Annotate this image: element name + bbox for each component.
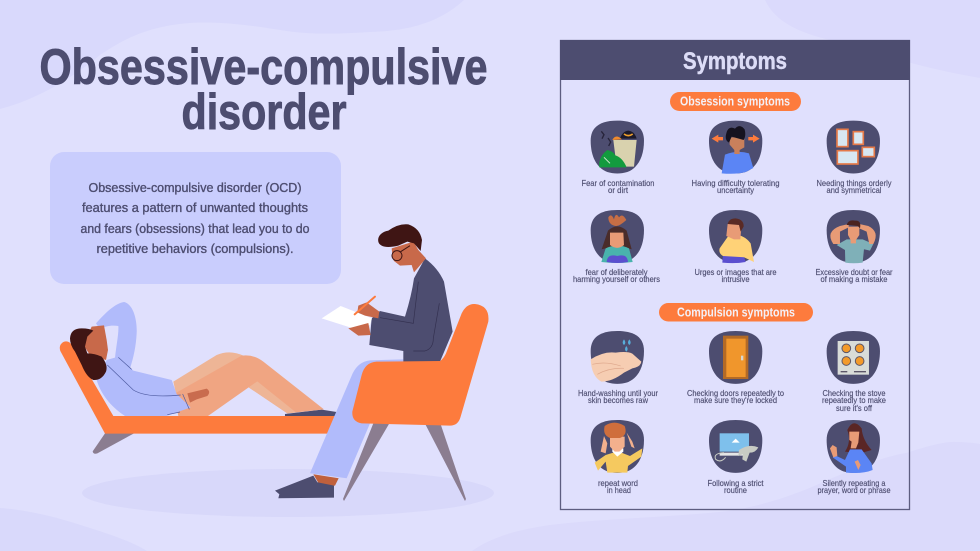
captions: compulsion symptoms [578,388,891,495]
icon: person with arrows [709,121,762,174]
captions: compulsion symptoms: Silently repeating a [822,478,886,488]
icon: person with brain [591,420,644,473]
captions: compulsion symptoms: Following a strict [708,478,764,488]
captions: compulsion symptoms: Checking the stove [822,388,886,398]
text block: OCD description [50,152,341,284]
text block: OCD description: Obsessive-compulsive disorder (OCD) [88,181,302,195]
captions: obsession symptoms: and symmetrical [826,185,882,195]
heading: obsession symptoms: Obsession symptoms [680,94,790,108]
captions: obsession symptoms: intrusive [722,274,750,284]
captions: compulsion symptoms: repeatedly to make [822,395,886,405]
title [40,39,488,140]
icon group: obsession row icons [591,121,880,263]
captions: compulsion symptoms: in head [607,485,631,495]
patient arm behind head [96,302,137,368]
captions: obsession symptoms: or dirt [608,185,629,195]
couch [60,341,335,434]
captions: compulsion symptoms: Checking doors repeatedly to [687,388,784,398]
heading: obsession symptoms [670,92,801,111]
therapist lower hand [348,323,371,336]
therapist upper hand [357,302,379,318]
therapist ankle [313,474,339,486]
title: Obsessive-compulsive [40,39,488,95]
captions: compulsion symptoms: prayer, word or phrase [818,485,891,495]
icon: person hand on face [709,210,762,263]
captions: compulsion symptoms: repeat word [598,478,638,488]
pen [355,297,375,314]
captions: obsession symptoms: of making a mistake [820,274,888,284]
captions: obsession symptoms: Needing things orderly [816,178,892,188]
icon: door [709,331,762,384]
icon: man holding head [827,210,880,263]
therapist neck and face [392,242,426,272]
patient torso [97,357,191,416]
icon: stove [827,331,880,384]
heading: compulsion symptoms [659,303,813,322]
patient hand [187,389,209,403]
text block: OCD description: features a pattern of unwanted thoughts [82,201,308,215]
glasses [392,246,410,261]
patient face [83,325,108,360]
icon: woman praying [827,420,880,473]
captions: obsession symptoms: uncertainty [717,185,755,195]
chair [352,304,488,426]
captions: obsession symptoms [573,178,893,284]
captions: compulsion symptoms: make sure they're locked [694,395,777,405]
captions: compulsion symptoms: sure it's off [836,403,873,413]
captions: obsession symptoms: harming yourself or others [573,274,660,284]
captions: obsession symptoms: fear of deliberately [586,267,648,277]
captions: obsession symptoms: Fear of contamination [582,178,655,188]
captions: compulsion symptoms: Hand-washing until your [578,388,658,398]
therapist trousers [310,359,403,478]
icon: woman covering face [591,210,644,263]
captions: compulsion symptoms: skin becomes raw [588,395,649,405]
paper [322,306,372,330]
text block: OCD description: and fears (obsessions) that lead you to do [80,222,310,236]
patient front leg [174,355,324,416]
symptoms header: Symptoms [683,48,787,75]
captions: obsession symptoms: Having difficulty tolerating [692,178,780,188]
therapist hair [378,224,422,251]
icon: picture frames [827,121,880,173]
panel: symptoms [560,40,910,510]
chair legs [343,423,466,501]
heading: compulsion symptoms: Compulsion symptoms [677,306,795,320]
text block: OCD description: repetitive behaviors (compulsions). [96,242,294,256]
shoe [285,410,337,416]
icon: washing hands [591,331,644,384]
title: disorder [182,84,346,140]
patient back leg [173,352,250,397]
icon group: compulsion row icons [591,331,880,473]
therapist jacket [369,258,453,362]
patient hair [70,328,107,380]
icon: trash can [591,121,644,173]
captions: obsession symptoms: Excessive doubt or fear [816,267,893,277]
couch leg [93,433,134,454]
icon: screen and controller [709,420,762,473]
captions: compulsion symptoms: routine [724,485,747,495]
illustration: patient on couch [60,302,337,454]
floor shadow [82,469,494,517]
therapist shoe [275,476,334,498]
symptoms header [560,40,910,80]
illustration: therapist in chair [275,224,488,501]
captions: obsession symptoms: Urges or images that are [694,267,777,277]
patient shin shading [249,381,296,413]
